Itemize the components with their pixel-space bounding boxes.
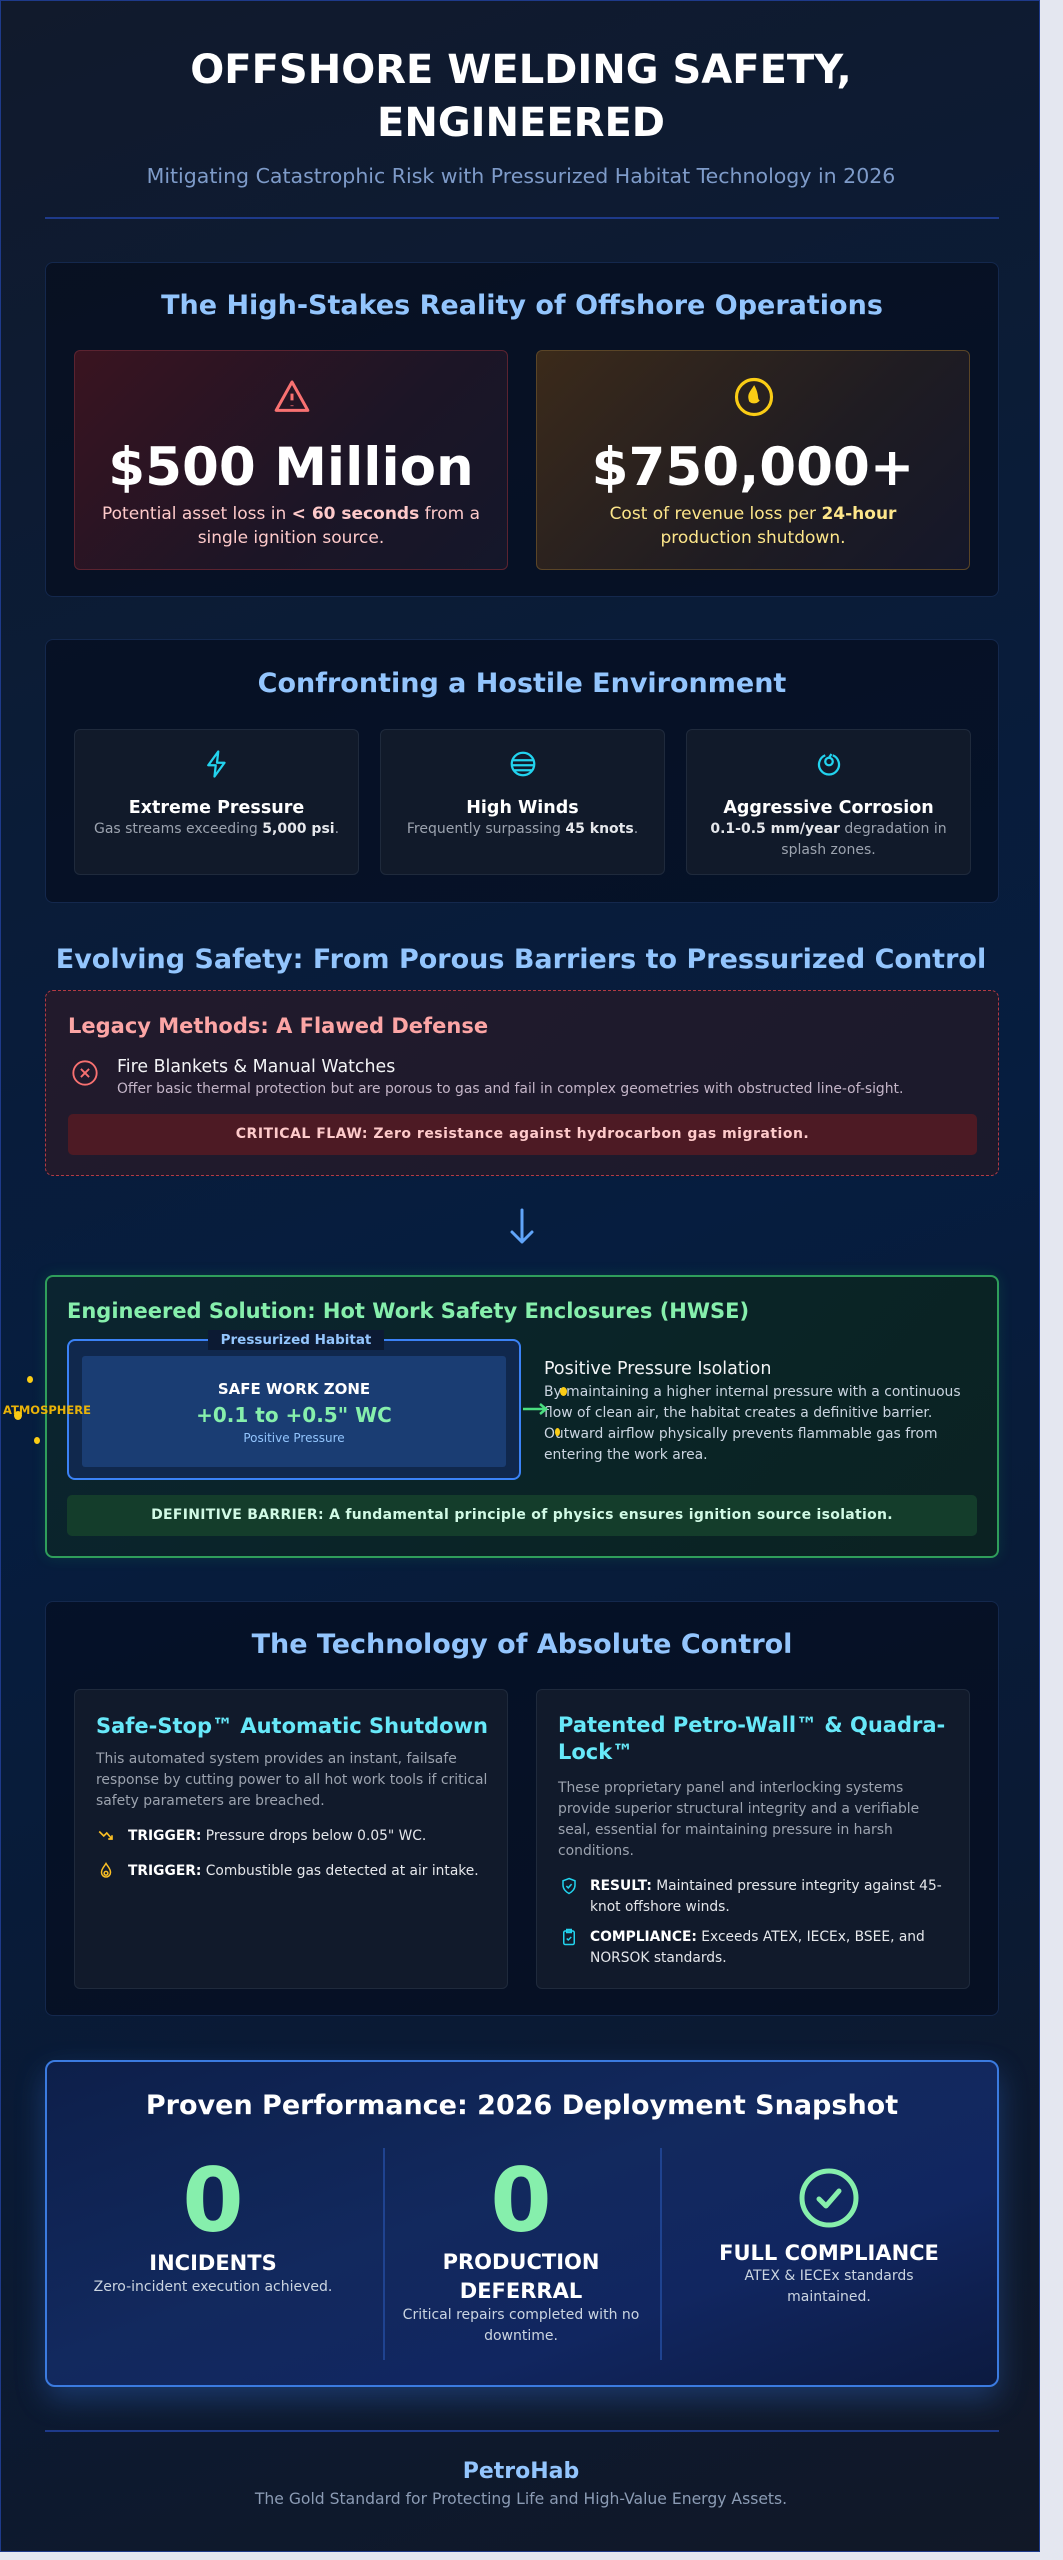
card: high winds: High Winds (466, 798, 579, 818)
stat: zero production deferral: downtime. (484, 2328, 558, 2344)
arrow: outward airflow (523, 1387, 567, 1436)
card: corrosion: Aggressive Corrosion (723, 798, 934, 818)
callout: definitive barrier: DEFINITIVE BARRIER: A fundamental principle of physics ensures ignition source isolation. (151, 1507, 893, 1523)
inner: safe work zone: +0.1 to +0.5" WC (196, 1403, 392, 1427)
icon: pressure drop (98, 1830, 113, 1840)
icon: clipboard (563, 1928, 575, 1946)
callout: definitive barrier (67, 1495, 977, 1536)
panel: proven performance (45, 2060, 999, 2387)
panel: high-stakes reality (45, 262, 999, 597)
text: positive pressure isolation: Positive Pressure Isolation (544, 1359, 771, 1379)
card: safe-stop: TRIGGER: Combustible gas detected at air intake. (128, 1863, 479, 1879)
label: pressurized habitat: Pressurized Habitat (221, 1332, 371, 1348)
text: asset loss: single ignition source. (198, 528, 384, 548)
stat: $500 Million: $500 Million (108, 437, 474, 498)
stat: zero production deferral: 0 (490, 2149, 552, 2252)
card: corrosion: splash zones. (781, 842, 876, 858)
card: safe-stop: Safe-Stop™ Automatic Shutdown (96, 1714, 488, 1738)
footer: PetroHab (463, 2459, 579, 2484)
stat: full compliance (719, 2168, 939, 2305)
stat: full compliance: ATEX & IECEx standards (744, 2268, 914, 2284)
heading: high-stakes: The High-Stakes Reality of Offshore Operations (161, 290, 883, 321)
stat: zero production deferral: Critical repairs completed with no (403, 2307, 639, 2323)
stat: zero incidents: INCIDENTS (149, 2251, 277, 2275)
panel: legacy methods (45, 990, 999, 1176)
card: corrosion: 0.1-0.5 mm/year degradation in (710, 821, 947, 837)
heading: technology: The Technology of Absolute Control (252, 1629, 792, 1660)
card: high winds: Frequently surpassing 45 knots. (407, 821, 638, 837)
footer (254, 2459, 787, 2508)
card: corrosion (686, 729, 971, 875)
card: petro-wall: conditions. (558, 1843, 634, 1859)
card: extreme pressure (74, 729, 359, 875)
label: atmosphere with gas dots: ATMOSPHERE (3, 1403, 91, 1417)
heading: performance: Proven Performance: 2026 Deployment Snapshot (146, 2090, 898, 2121)
card: petro-wall: Patented Petro-Wall™ & Quadra- (558, 1713, 945, 1737)
text: positive pressure isolation: By maintaining a higher internal pressure with a continuous (544, 1384, 961, 1400)
card: petro-wall: These proprietary panel and interlocking systems (558, 1780, 903, 1796)
stat: zero production deferral (403, 2149, 639, 2344)
icon: bolt (207, 750, 226, 778)
card: petro-wall (536, 1689, 970, 1989)
icon: check circle (800, 2168, 858, 2228)
text: positive pressure isolation: entering the work area. (544, 1447, 708, 1463)
label: atmosphere with gas dots (3, 1376, 91, 1444)
subtitle: Mitigating Catastrophic Risk with Pressurized Habitat Technology in 2026 (147, 164, 895, 188)
stat: zero production deferral: DEFERRAL (460, 2279, 582, 2303)
heading: evolving safety: Evolving Safety: From Porous Barriers to Pressurized Control (56, 944, 986, 975)
panel: legacy methods: Offer basic thermal protection but are porous to gas and fail in complex geometries with obstructed line-of-sight. (117, 1081, 903, 1097)
card: safe-stop: safety parameters are breached. (96, 1793, 325, 1809)
diagram: pressurized habitat (67, 1339, 521, 1480)
card: high winds (380, 729, 665, 875)
card: safe-stop: This automated system provides an instant, failsafe (96, 1751, 457, 1767)
icon: x circle (72, 1060, 98, 1086)
card: petro-wall: COMPLIANCE: Exceeds ATEX, IECEx, BSEE, and (590, 1929, 925, 1945)
text: revenue loss: Cost of revenue loss per 24-hour (610, 504, 896, 524)
text: revenue loss: production shutdown. (660, 528, 846, 548)
stat: $750,000+: $750,000+ (592, 437, 914, 498)
card: extreme pressure: Gas streams exceeding 5,000 psi. (94, 821, 339, 837)
card: $500 million (74, 350, 508, 570)
stat: zero incidents (94, 2149, 332, 2295)
card: petro-wall: Lock™ (558, 1740, 633, 1764)
text: revenue loss (610, 504, 896, 548)
footer: The Gold Standard for Protecting Life and High-Value Energy Assets. (255, 2490, 787, 2508)
heading: hostile environment: Confronting a Hostile Environment (258, 668, 786, 699)
stat: full compliance: FULL COMPLIANCE (719, 2241, 939, 2265)
stat: zero production deferral: PRODUCTION (443, 2250, 599, 2274)
arrow: down (510, 1208, 534, 1244)
panel: HWSE solution (45, 1275, 999, 1558)
icon: flame coin (734, 378, 774, 416)
callout: critical flaw: CRITICAL FLAW: Zero resistance against hydrocarbon gas migration. (236, 1126, 809, 1142)
stat: zero incidents: Zero-incident execution achieved. (94, 2279, 332, 2295)
card: extreme pressure: Extreme Pressure (129, 798, 304, 818)
inner: safe work zone: Positive Pressure (243, 1431, 345, 1445)
card: safe-stop (74, 1689, 508, 1989)
icon: warning (274, 380, 310, 412)
text: positive pressure isolation: flow of clean air, the habitat creates a definitive barrier. (544, 1405, 932, 1421)
card: petro-wall: NORSOK standards. (590, 1950, 727, 1966)
heading: HWSE: Engineered Solution: Hot Work Safety Enclosures (HWSE) (67, 1299, 749, 1323)
text: positive pressure isolation: Outward airflow physically prevents flammable gas from (544, 1426, 938, 1442)
card: $750,000+ (536, 350, 970, 570)
card: safe-stop: TRIGGER: Pressure drops below 0.05" WC. (128, 1828, 426, 1844)
text: positive pressure isolation (544, 1359, 961, 1463)
title: ENGINEERED (377, 100, 665, 146)
icon: wind globe (510, 752, 536, 776)
card: petro-wall: knot offshore winds. (590, 1898, 730, 1914)
card: petro-wall: RESULT: Maintained pressure integrity against 45- (590, 1878, 942, 1894)
icon: shield (562, 1878, 576, 1894)
icon: corrosion (818, 753, 840, 776)
callout: critical flaw (68, 1114, 977, 1155)
title (190, 47, 852, 146)
title: OFFSHORE WELDING SAFETY, (190, 47, 852, 93)
panel: technology (45, 1601, 999, 2016)
inner: safe work zone: SAFE WORK ZONE (218, 1380, 370, 1398)
card: petro-wall: provide superior structural integrity and a verifiable (558, 1801, 919, 1817)
text: fire blankets: Fire Blankets & Manual Watches (117, 1057, 395, 1077)
label: pressurized habitat (208, 1330, 384, 1350)
panel: proven performance: maintained. (787, 2289, 871, 2305)
heading: legacy: Legacy Methods: A Flawed Defense (68, 1014, 488, 1038)
inner: safe work zone (82, 1356, 506, 1467)
panel: hostile environment (45, 639, 999, 903)
stat: zero incidents: 0 (182, 2149, 244, 2252)
text: asset loss: Potential asset loss in < 60 seconds from a (102, 504, 480, 524)
text: asset loss (102, 504, 480, 548)
card: petro-wall: seal, essential for maintaining pressure in harsh (558, 1822, 893, 1838)
icon: gas flame (100, 1862, 112, 1878)
card: safe-stop: response by cutting power to all hot work tools if critical (96, 1772, 487, 1788)
